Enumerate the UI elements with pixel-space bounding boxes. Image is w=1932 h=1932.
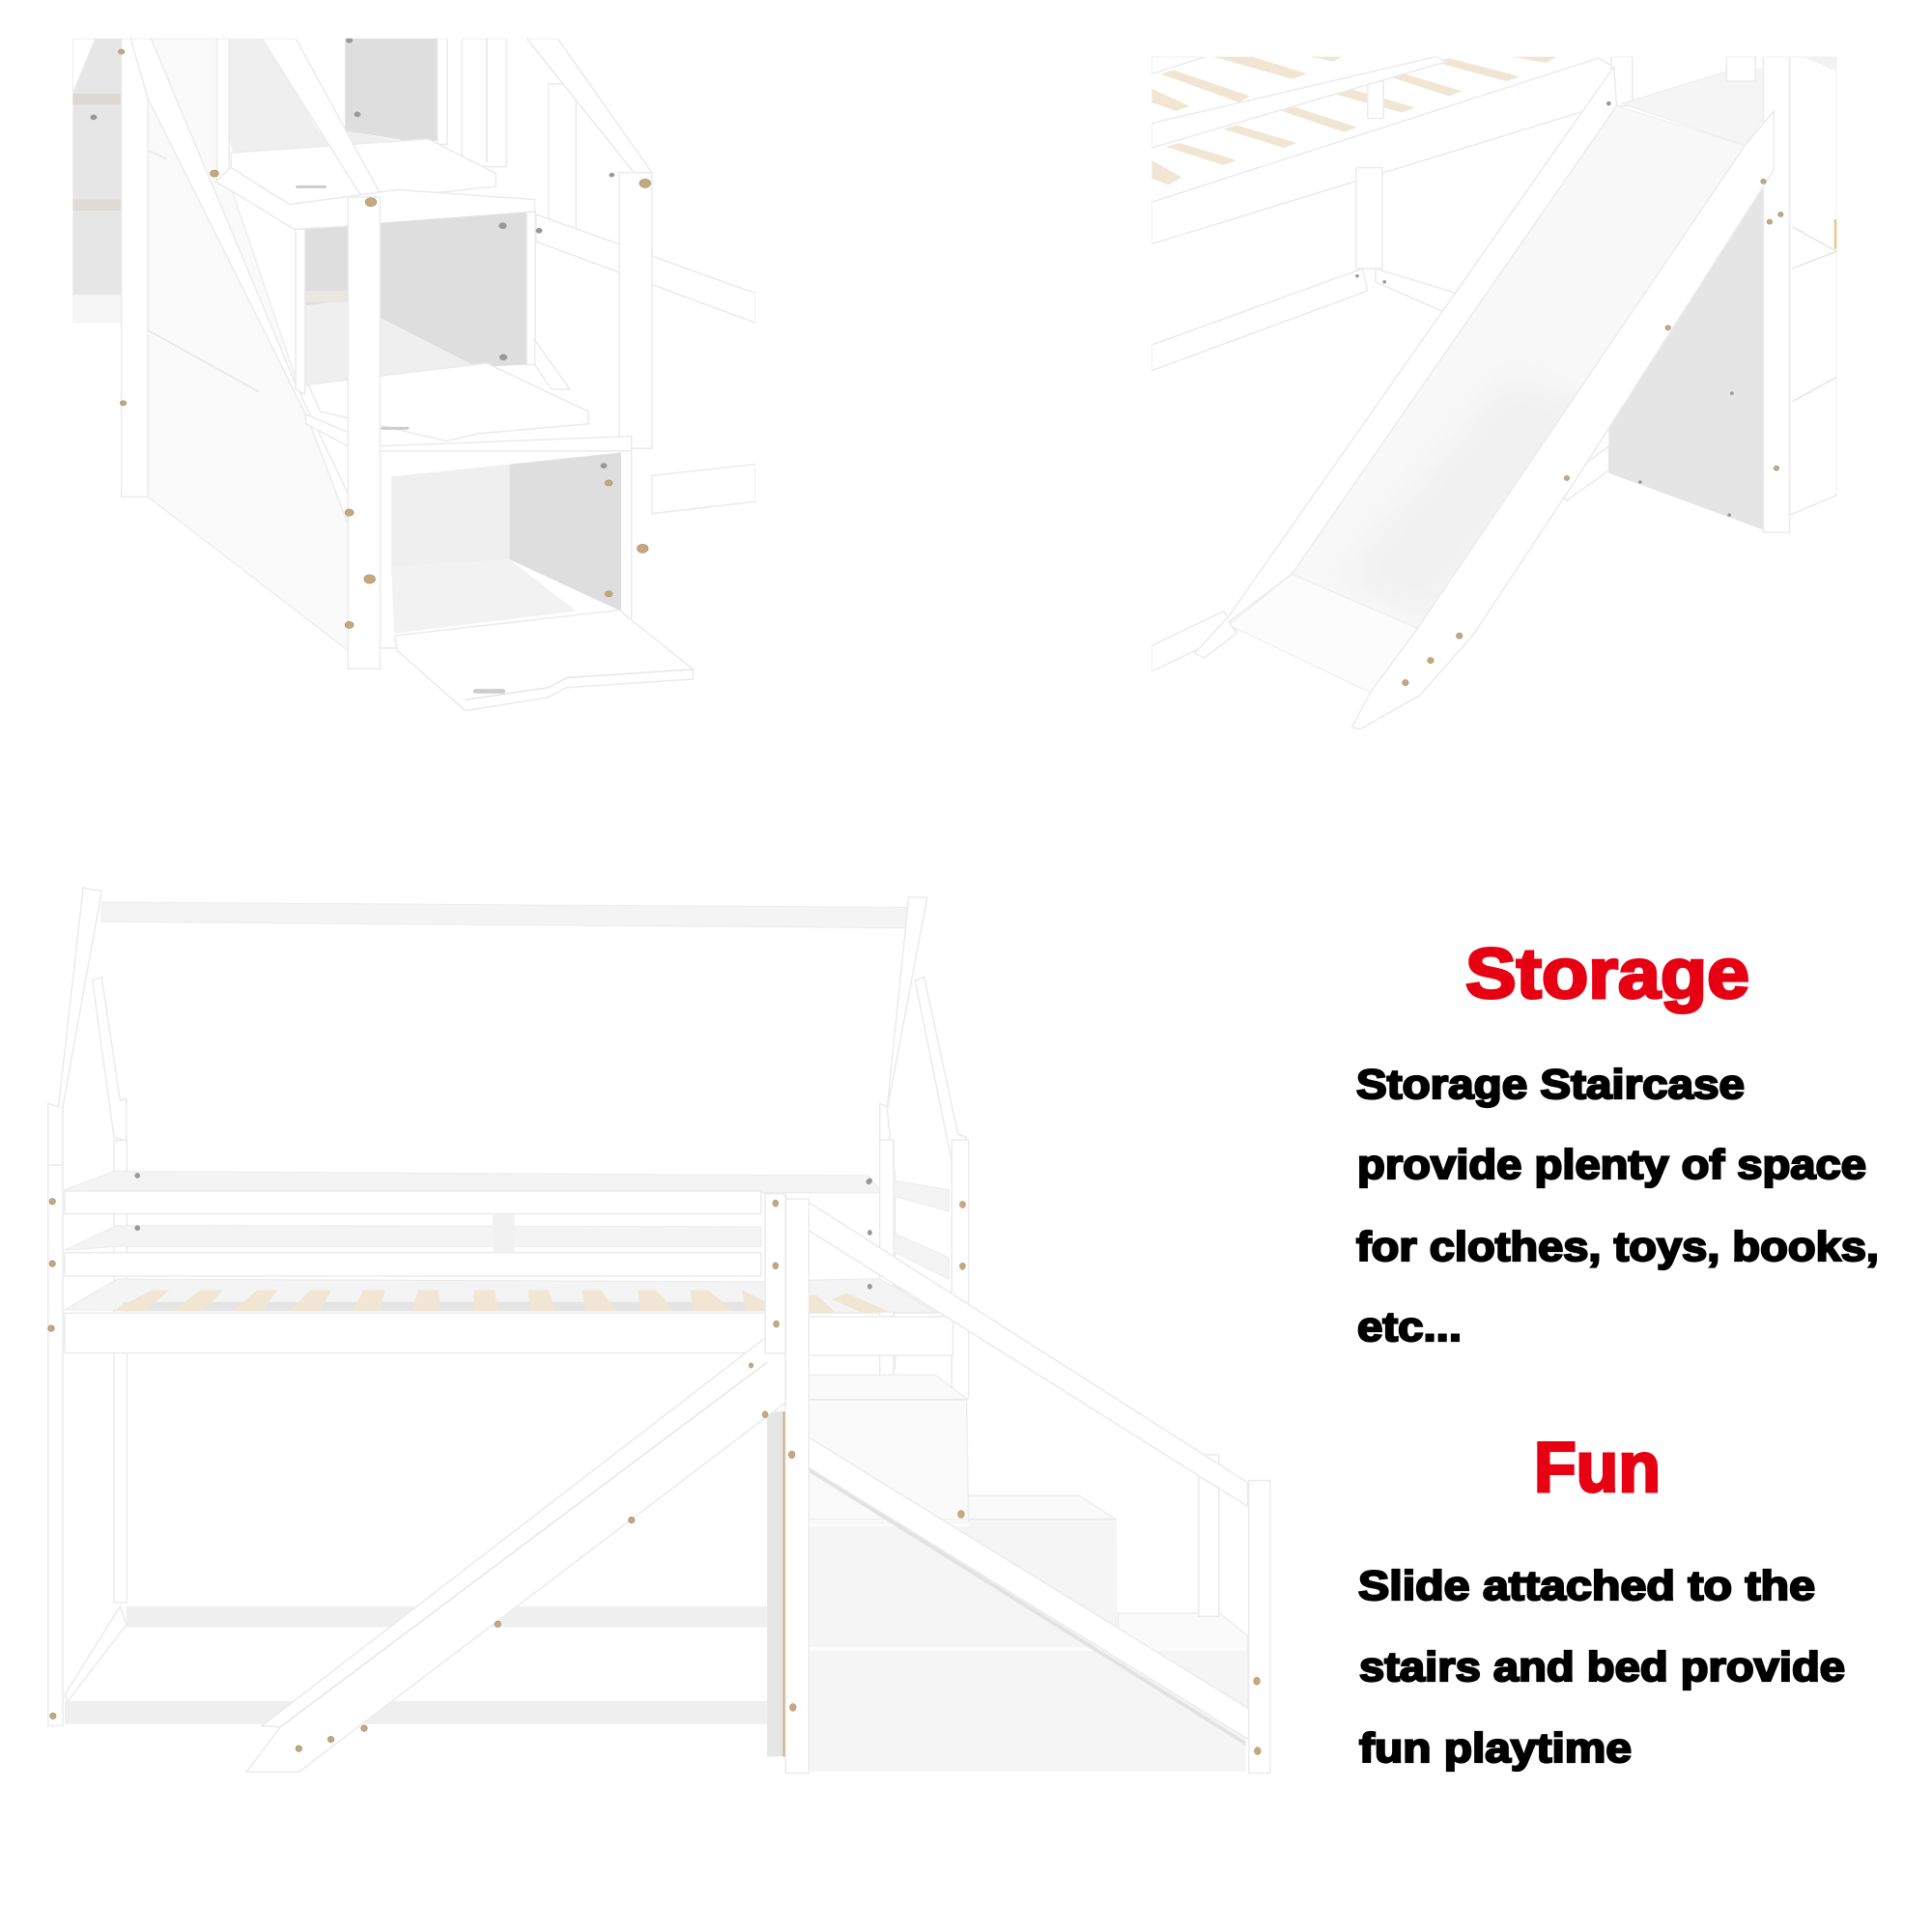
text block: storage description: etc... — [1357, 1304, 1462, 1350]
stair steps — [809, 1375, 1248, 1772]
heading: Fun: Fun — [1534, 1429, 1661, 1507]
panel: storage staircase close-up — [72, 38, 755, 711]
lower frame — [48, 1141, 767, 1726]
right handrail — [526, 39, 755, 514]
slide surface — [1195, 67, 1774, 729]
text block: fun description: fun playtime — [1359, 1725, 1632, 1772]
text block: fun description — [1358, 1563, 1845, 1772]
panel: slide close-up — [1151, 57, 1836, 729]
screws — [1355, 101, 1783, 686]
upper rails — [65, 1172, 949, 1369]
middle storage cube — [215, 167, 570, 414]
grey side of staircase — [1608, 187, 1763, 529]
bed deck and slats — [65, 1279, 955, 1353]
roof frame — [48, 888, 966, 1178]
text block: storage description: for clothes, toys, books, — [1356, 1224, 1879, 1270]
text block: fun description: Slide attached to the — [1358, 1563, 1815, 1609]
screws — [749, 1179, 1261, 1755]
text block: fun description: stairs and bed provide — [1359, 1644, 1845, 1690]
text block: storage description: Storage Staircase — [1356, 1062, 1745, 1108]
panel: full loft bed, left portion — [48, 888, 966, 1772]
wooden slats — [1151, 57, 1556, 185]
panel: full loft bed, staircase portion — [749, 1140, 1270, 1773]
stair stringer — [809, 1467, 1246, 1746]
text block: storage description: provide plenty of space — [1357, 1142, 1866, 1188]
pull-out door — [394, 611, 694, 711]
middle tread — [308, 363, 588, 441]
heading: Storage: Storage — [1465, 935, 1749, 1013]
upper tread — [230, 138, 497, 192]
screws on bed left portion — [48, 1173, 871, 1751]
slide — [246, 1339, 785, 1772]
step block behind slide — [1622, 69, 1769, 146]
screws — [118, 38, 651, 629]
handrail — [809, 1203, 1248, 1506]
lower storage cube — [305, 414, 632, 648]
grey end of staircase — [767, 1411, 785, 1756]
text block: storage description — [1356, 1062, 1879, 1350]
